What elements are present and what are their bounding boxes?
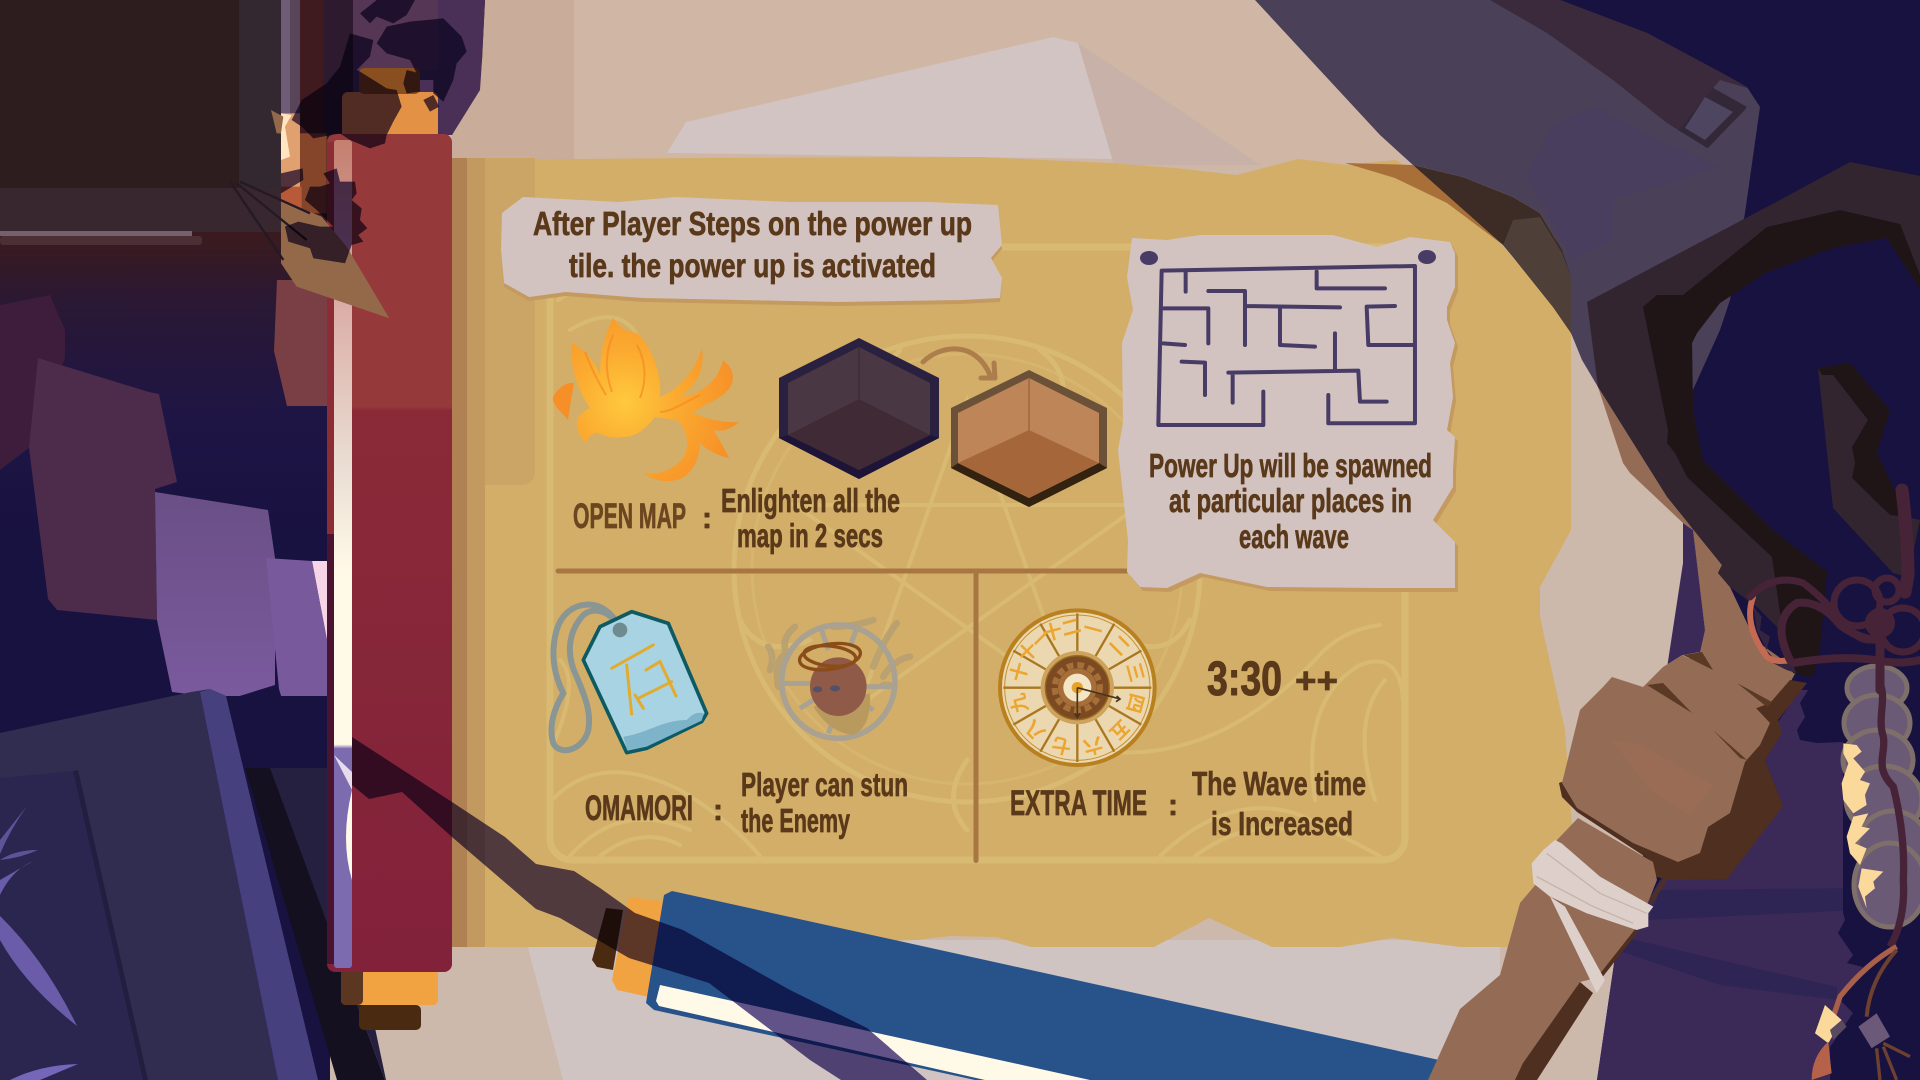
kunai blade — [230, 110, 389, 318]
cloak paper shadow — [1345, 163, 1571, 333]
purple block right — [266, 558, 330, 758]
icon: clock dial: 三 — [1122, 660, 1147, 684]
kunai flag behind scroll — [281, 113, 327, 213]
bandage wrap — [1532, 840, 1653, 993]
red vertical scroll — [327, 68, 452, 1030]
maze note text: each wave — [1239, 518, 1349, 555]
icon: clock dial: 十 — [1007, 660, 1033, 684]
icon: clock dial: 一 — [1080, 618, 1105, 643]
purple block left — [155, 492, 275, 699]
decorative paper motif — [550, 247, 1405, 860]
icon: clock dial: 九 — [1007, 690, 1033, 715]
text: open map: map in 2 secs — [737, 517, 883, 554]
text: omamori — [585, 766, 908, 839]
text: omamori: Player can stun — [741, 766, 908, 803]
text: open map — [573, 482, 900, 554]
paper scroll — [452, 157, 1572, 947]
icon: omamori charm — [551, 605, 707, 753]
maze note text: Power Up will be spawned — [1149, 447, 1432, 484]
text: open map: OPEN MAP — [573, 497, 686, 536]
foliage overlay — [281, 0, 467, 263]
text: extra time: EXTRA TIME — [1010, 784, 1147, 823]
icon: clock dial — [1000, 610, 1155, 765]
icon: stunned enemy — [768, 620, 910, 738]
arrow: tile transition — [923, 349, 995, 378]
icon: clock dial: 十二 — [1040, 615, 1083, 646]
text: extra time — [1010, 765, 1366, 842]
text: wave time readout: ++ — [1295, 660, 1338, 701]
icon: clock dial: 四 — [1122, 691, 1147, 715]
pale pink glow — [312, 561, 330, 650]
icon: clock dial: 八 — [1021, 715, 1050, 744]
background: dark room on the left — [0, 0, 485, 1080]
maze — [1158, 266, 1415, 425]
bead necklace — [1812, 666, 1920, 1080]
right side: navy background — [1400, 0, 1920, 1080]
text: open map: Enlighten all the — [721, 482, 900, 519]
text: omamori: the Enemy — [741, 802, 850, 839]
text: open map: : — [702, 502, 712, 535]
plum rock — [29, 358, 177, 620]
icon: dark hex tile — [779, 338, 939, 479]
text: extra time: The Wave time — [1192, 765, 1366, 802]
arm emerging under hat — [1598, 387, 1797, 720]
icon: clock dial: 六 — [1080, 732, 1105, 758]
torn callout: activation rule: After Player Steps on the power up — [533, 205, 972, 242]
maze note text: at particular places in — [1169, 482, 1412, 519]
maze note text — [1149, 447, 1432, 555]
text: extra time: is Increased — [1211, 805, 1353, 842]
icon: phoenix — [553, 318, 739, 481]
torn callout: activation rule: tile. the power up is activated — [569, 247, 936, 284]
cream bead highlights — [1842, 743, 1883, 908]
text: omamori: OMAMORI — [585, 789, 693, 828]
book cover with leaf pattern — [0, 689, 318, 1080]
shadow branch across scene — [352, 737, 927, 1080]
torn callout: activation rule — [501, 197, 1002, 306]
icon: clock dial: 二 — [1105, 632, 1133, 660]
panel dividers — [558, 571, 1130, 862]
text: omamori: : — [713, 794, 723, 827]
text: wave time readout: 3:30 — [1207, 653, 1282, 706]
icon: clock dial: 五 — [1105, 715, 1133, 744]
arched hat silhouette — [1587, 162, 1920, 677]
icon: lit hex tile — [951, 370, 1107, 507]
icon: clock dial: 十一 — [1014, 624, 1057, 667]
pins — [1140, 250, 1436, 265]
icon: clock dial: 七 — [1050, 732, 1074, 758]
knotted cord — [1750, 490, 1920, 690]
hooded cloak — [1255, 0, 1760, 420]
clenched hand and stick — [1428, 652, 1807, 1080]
panel: torn note with maze — [1118, 235, 1458, 592]
blue rolled scroll — [592, 891, 1530, 1080]
text: extra time: : — [1168, 789, 1178, 822]
